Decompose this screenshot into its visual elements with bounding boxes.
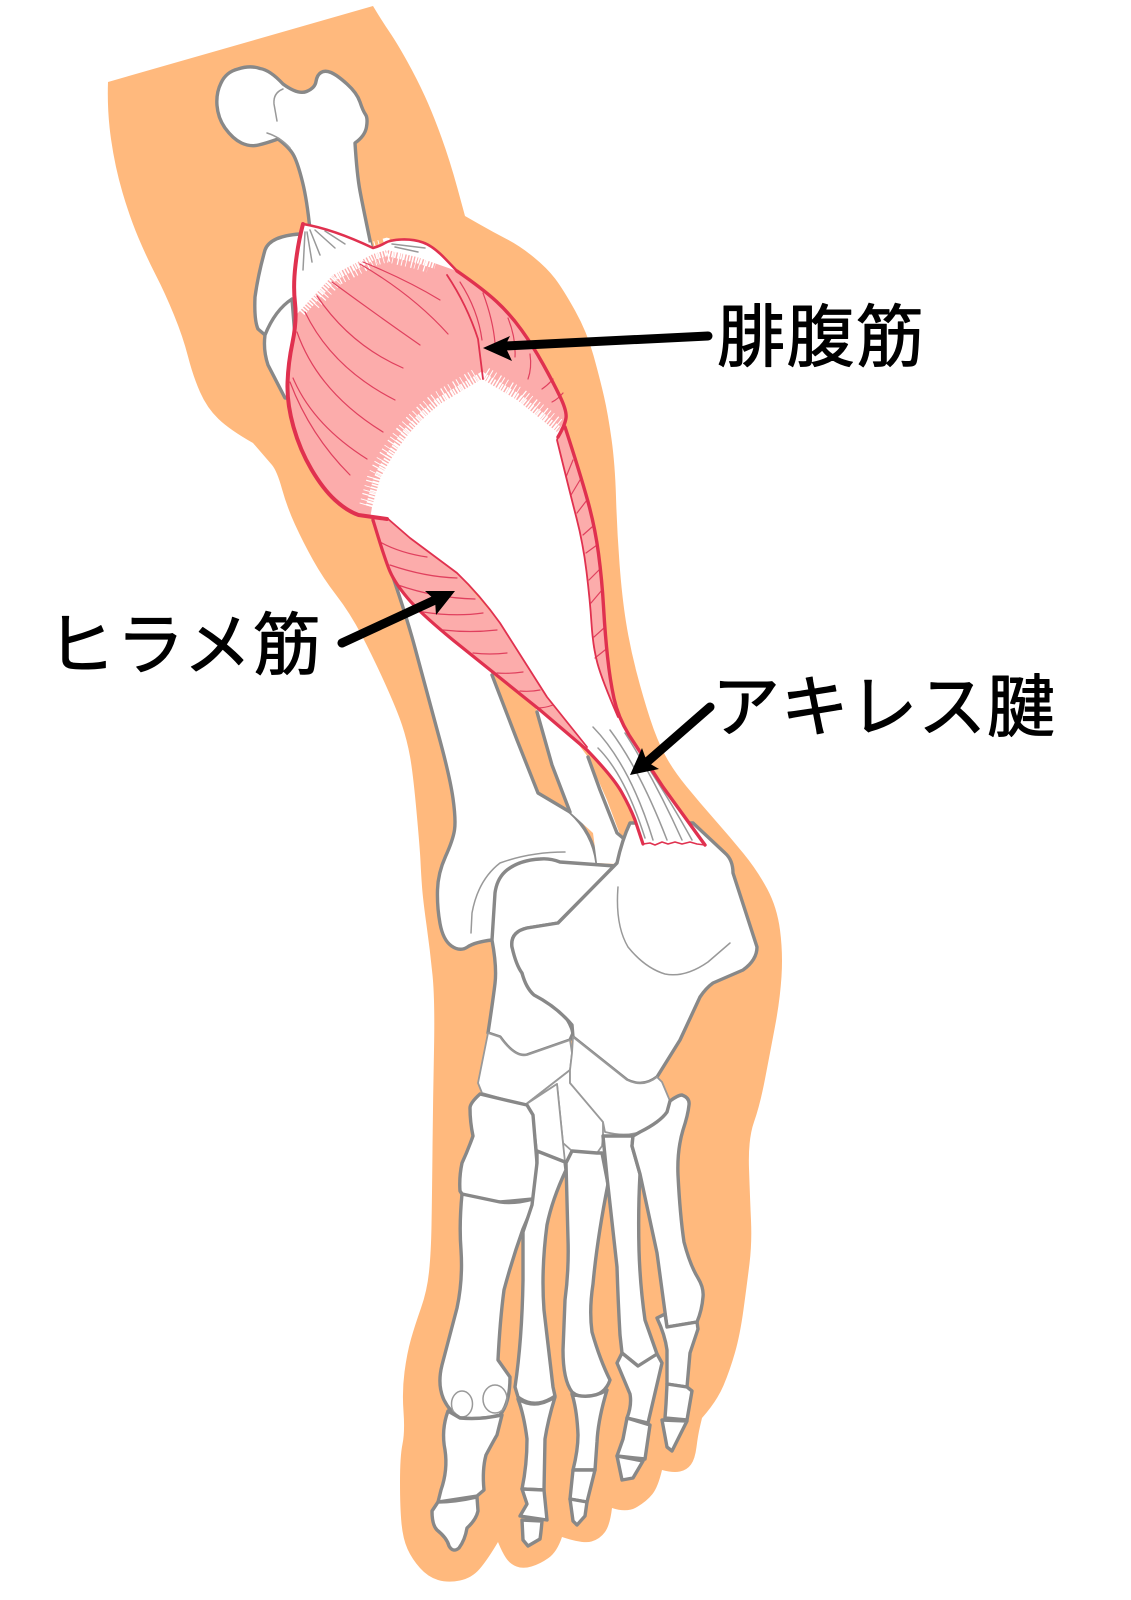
muscle head divider — [447, 275, 483, 379]
calcaneus inner contour — [617, 887, 730, 975]
label: achilles tendon: アキレス腱 — [712, 670, 1055, 746]
knee condyles — [255, 234, 300, 400]
midfoot bones — [460, 1033, 670, 1202]
white tendon area — [287, 224, 705, 845]
label: gastrocnemius: 腓腹筋 — [717, 300, 924, 376]
tendon strands at origin — [303, 230, 425, 270]
gastrocnemius outline top — [303, 224, 457, 271]
gastrocnemius belly — [287, 250, 566, 519]
third toe bones — [563, 1151, 610, 1525]
arrow: soleus — [342, 591, 455, 643]
arrow: gastrocnemius — [483, 336, 708, 361]
femur — [217, 67, 372, 250]
label: soleus: ヒラメ筋 — [47, 608, 321, 684]
serrated tendon edge, short teeth — [372, 379, 557, 507]
gastrocnemius outline left — [287, 224, 387, 519]
fibula — [520, 685, 623, 864]
lateral soleus strip — [557, 427, 618, 717]
outer calf and tendon line — [565, 427, 705, 845]
arrow: achilles tendon — [630, 707, 710, 775]
achilles insertion edge — [643, 842, 705, 845]
muscle fibres — [290, 262, 563, 475]
talus — [488, 859, 615, 1055]
second toe bones — [515, 1151, 566, 1546]
fifth toe bones — [632, 1095, 703, 1451]
calcaneus — [512, 823, 757, 1083]
gastrocnemius and soleus muscle group — [287, 224, 705, 845]
gastrocnemius outline right — [457, 271, 566, 437]
serrated upper edge, long teeth — [310, 250, 430, 300]
leg silhouette — [108, 6, 782, 1582]
big toe bones — [432, 1194, 533, 1550]
achilles tendon strands — [593, 727, 692, 840]
fourth toe bones — [603, 1136, 662, 1480]
tibia — [373, 520, 597, 949]
serrated tendon edge, long teeth — [372, 379, 557, 507]
serrated upper edge, short teeth — [300, 250, 436, 311]
medial soleus — [373, 518, 643, 844]
